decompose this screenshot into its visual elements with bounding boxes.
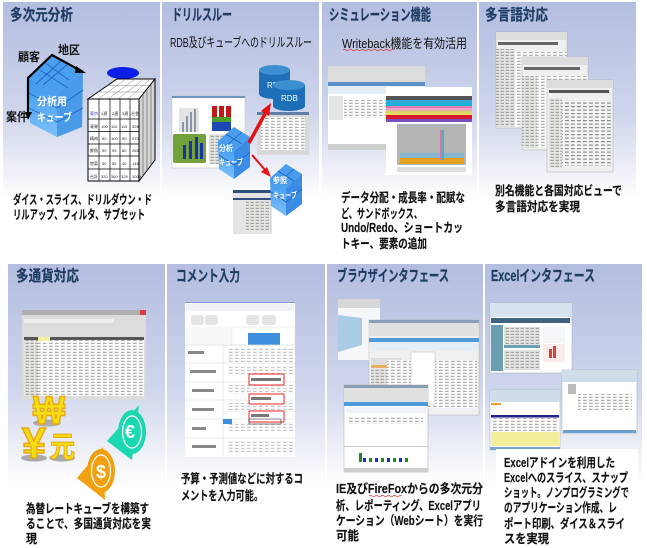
- description: [26, 501, 151, 546]
- excel screenshot: wide sheet: [562, 370, 637, 433]
- description: [181, 471, 303, 503]
- data table cube: 325: [132, 124, 139, 129]
- title: Excelインタフェース: Excelインタフェース: [491, 267, 595, 285]
- data table cube: 青果: [90, 123, 98, 129]
- icon: analysis cube: 分析用: [37, 94, 67, 108]
- description: 析、レポーティング、Excelアプリ: [336, 498, 481, 513]
- icon: euro: €: [125, 422, 135, 442]
- icon: currency won yuan yen: ¥: [22, 419, 47, 468]
- arrow: to RDB: [249, 103, 271, 143]
- icon: RDB back cylinder: [259, 65, 290, 99]
- icon: dollar: [77, 447, 115, 500]
- panel: 多通貨対応: [8, 264, 165, 546]
- data table cube: 320: [101, 174, 108, 179]
- description: ど、サンドボックス、: [341, 206, 422, 221]
- subtitle: Writeback機能を有効活用: [342, 36, 467, 51]
- data table cube: 90: [102, 148, 107, 153]
- panel: ブラウザインタフェース: [327, 264, 483, 543]
- panel: コメント入力: [167, 264, 325, 520]
- description: 多言語対応を実現: [495, 199, 580, 214]
- icon: analysis cube: キューブ: [37, 110, 72, 124]
- sheet screenshot: [233, 190, 272, 234]
- description: [495, 183, 622, 214]
- description: [336, 481, 483, 543]
- table screenshot: [257, 112, 309, 155]
- data table cube: 東京: [90, 110, 98, 116]
- icon: analysis cube small: [218, 127, 250, 179]
- title: 多言語対応: 多言語対応: [485, 6, 548, 24]
- description: 現: [26, 532, 37, 546]
- panel: Excelインタフェース: [485, 264, 642, 548]
- panel: ドリルスルー: [162, 2, 319, 234]
- icon: RDB back cylinder: RDB: [267, 81, 284, 90]
- data table cube: 3週: [122, 110, 128, 116]
- description: ることで、多国通貨対応を実: [26, 516, 151, 531]
- description: [341, 190, 465, 251]
- description box: Excelアドインを利用した: [504, 455, 615, 470]
- data table cube: 鮮魚: [90, 147, 98, 153]
- title: ドリルスルー: ドリルスルー: [172, 7, 232, 24]
- description: メントを入力可能。: [181, 488, 263, 503]
- data table cube: 精肉: [90, 135, 98, 141]
- icon: dollar: $: [96, 462, 106, 482]
- data table cube: 325: [121, 174, 128, 179]
- data table cube: [88, 79, 155, 181]
- description: 可能: [336, 528, 359, 543]
- icon: euro: [107, 405, 146, 460]
- data table cube: 55: [112, 161, 117, 166]
- data table cube: 1週: [101, 110, 107, 116]
- screenshot stack: [338, 299, 479, 472]
- title: 多次元分析: 多次元分析: [10, 5, 73, 24]
- icon: analysis cube: [6, 42, 86, 137]
- data table cube: 95: [112, 148, 117, 153]
- icon: analysis cube: 案件: [6, 109, 28, 124]
- data table cube: 1005: [132, 174, 142, 179]
- data table cube: 50: [102, 161, 107, 166]
- data table cube: 合金: [131, 110, 139, 116]
- description: リルアップ、フィルタ、サブセット: [13, 207, 145, 222]
- description: Undo/Redo、ショートカッ: [341, 221, 463, 235]
- dashboard screenshot: [172, 96, 245, 168]
- data table cube: 115: [121, 124, 128, 129]
- screenshot stack: [496, 32, 613, 172]
- description: データ分配・成長率・配賦な: [341, 190, 465, 205]
- description: 為替レートキューブを構築す: [26, 501, 149, 516]
- icon: RDB front cylinder: RDB: [281, 94, 298, 103]
- icon: analysis cube small: キューブ: [219, 157, 243, 167]
- title: コメント入力: コメント入力: [176, 267, 240, 285]
- data table cube: 270: [132, 136, 139, 141]
- description box: スを実現: [504, 531, 549, 546]
- screenshot: [22, 310, 146, 400]
- data table cube: 40: [122, 161, 127, 166]
- description: [13, 192, 152, 222]
- panel: 多次元分析: [3, 2, 160, 232]
- icon: reference cube: キューブ: [273, 190, 297, 200]
- icon: currency won yuan yen: 元: [50, 432, 75, 464]
- icon: reference cube: 参照: [273, 175, 287, 185]
- subtitle: RDB及びキューブへのドリルスルー: [170, 35, 312, 50]
- arrow: to reference cube: [252, 155, 271, 177]
- data table cube: 100: [111, 136, 118, 141]
- icon: analysis cube small: 分析: [219, 143, 233, 153]
- data table cube: 90: [122, 136, 127, 141]
- title: シミュレーション機能: シミュレーション機能: [329, 5, 431, 24]
- data table cube: 145: [132, 161, 139, 166]
- data table cube: 合計: [90, 173, 98, 179]
- data table cube: 惣菜: [90, 160, 98, 166]
- comment screenshot: [185, 302, 295, 457]
- description: ケーション（Webシート）を実行: [336, 513, 483, 528]
- description: トキー、要素の追加: [341, 236, 427, 251]
- description: IE及びFireFoxからの多次元分: [336, 481, 483, 496]
- description: 予算・予測値などに対するコ: [181, 471, 303, 486]
- title: ブラウザインタフェース: ブラウザインタフェース: [337, 266, 449, 285]
- excel screenshot: yellow table: [490, 390, 560, 450]
- panel: シミュレーション機能: [322, 2, 477, 251]
- spell-check underline: [343, 49, 394, 51]
- browser screenshot: [328, 66, 425, 150]
- data table cube: 80: [102, 136, 107, 141]
- icon: currency won yuan yen: [21, 389, 75, 468]
- excel screenshot: dashboard: [490, 303, 572, 373]
- data table cube: 80: [122, 148, 127, 153]
- data table cube: 100: [101, 124, 108, 129]
- data table cube: 360: [111, 174, 118, 179]
- data table cube: 2週: [112, 110, 118, 116]
- report screenshot with chart: [386, 87, 472, 175]
- title: 多通貨対応: 多通貨対応: [16, 266, 79, 285]
- icon: analysis cube: 地区: [58, 42, 80, 57]
- description: ダイス・スライス、ドリルダウン・ド: [13, 192, 152, 207]
- icon: RDB front cylinder: [273, 80, 305, 111]
- icon: blue disc: [107, 67, 139, 79]
- icon: currency won yuan yen: ₩: [33, 389, 65, 433]
- spell-check underline: [369, 495, 402, 497]
- icon: analysis cube: 顧客: [18, 49, 40, 64]
- data table cube: 265: [132, 148, 139, 153]
- panel: 多言語対応: [479, 2, 636, 232]
- icon: reference cube: [270, 164, 302, 216]
- data table cube: 110: [111, 124, 118, 129]
- description box: [496, 449, 638, 548]
